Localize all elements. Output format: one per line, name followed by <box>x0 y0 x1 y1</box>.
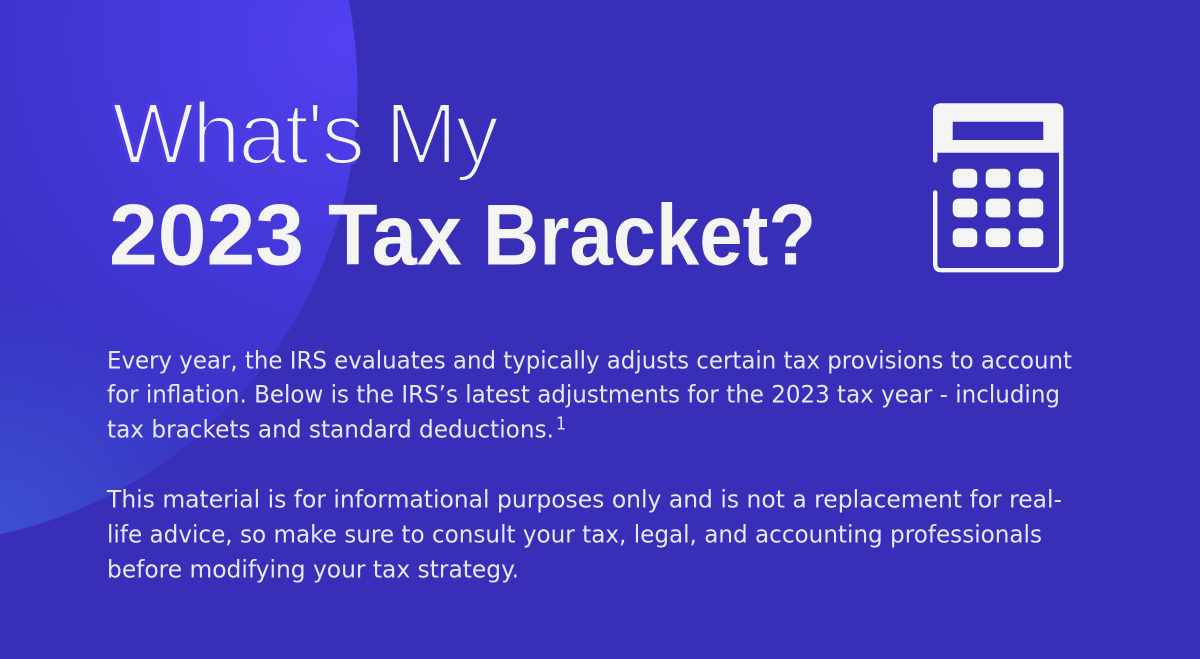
intro paragraph: tax brackets and standard deductions. <box>107 416 554 444</box>
title line 2: 2023 <box>109 188 304 284</box>
intro paragraph: Every year, the IRS evaluates and typically adjusts certain tax provisions to account <box>107 346 1072 374</box>
decorative gradient circle <box>0 0 358 545</box>
disclaimer paragraph: before modifying your tax strategy. <box>107 556 519 584</box>
title line 2 <box>109 188 816 284</box>
intro paragraph: 1 <box>556 414 566 434</box>
disclaimer paragraph <box>106 486 1062 584</box>
disclaimer paragraph: life advice, so make sure to consult your tax, legal, and accounting professionals <box>107 520 1042 548</box>
title line 1: What's My <box>112 86 500 182</box>
intro paragraph <box>107 346 1072 444</box>
icon: calculator <box>930 103 1063 270</box>
title <box>109 86 816 284</box>
title line 2: Bracket? <box>483 188 816 284</box>
title line 2: Tax <box>328 188 462 284</box>
disclaimer paragraph: This material is for informational purposes only and is not a replacement for real- <box>106 486 1062 514</box>
intro paragraph: for inflation. Below is the IRS’s latest adjustments for the 2023 tax year - including <box>107 380 1060 408</box>
